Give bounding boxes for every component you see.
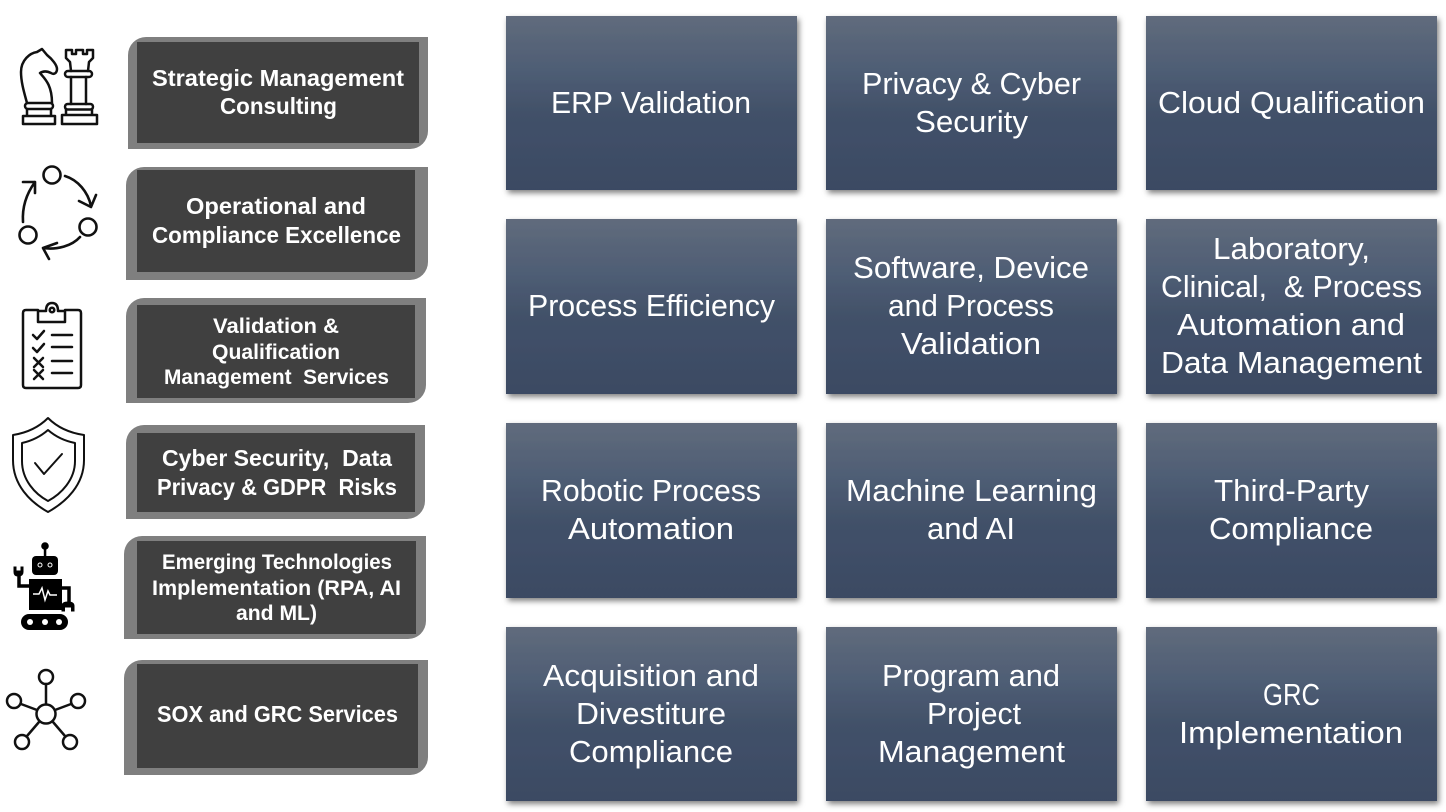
heading: Cyber Security, Data Privacy and GDPR Risks xyxy=(157,445,397,500)
tile: Laboratory, Clinical and Process Automation and Data Management xyxy=(1146,219,1437,394)
tile: Third-Party Compliance: Compliance xyxy=(1209,511,1373,546)
heading: Emerging Technologies Implementation xyxy=(152,551,401,625)
heading: Operational and Compliance Excellence: Operational and xyxy=(186,193,366,219)
tile: Software, Device and Process Validation: Validation xyxy=(901,326,1041,361)
tile: Machine Learning and AI: and AI xyxy=(927,511,1015,546)
tile: Privacy and Cyber Security: Privacy & Cyber xyxy=(862,66,1081,101)
icon: chess knight and rook xyxy=(21,49,97,124)
icon: checklist clipboard xyxy=(23,303,81,388)
heading: Validation and Qualification Management Services: Validation & xyxy=(213,315,339,338)
panel: Operational and Compliance Excellence xyxy=(126,167,428,280)
tile: Laboratory, Clinical and Process Automation and Data Management: Automation and xyxy=(1177,307,1405,342)
panel: Strategic Management Consulting xyxy=(128,37,428,149)
tile: Program and Project Management: Management xyxy=(878,734,1065,769)
heading: Strategic Management Consulting xyxy=(152,65,404,119)
heading: Emerging Technologies Implementation: Implementation (RPA, AI xyxy=(152,577,401,600)
tile: Robotic Process Automation xyxy=(506,423,797,598)
heading: Cyber Security, Data Privacy and GDPR Risks: Privacy & GDPR Risks xyxy=(157,474,397,500)
tile: Privacy and Cyber Security xyxy=(826,16,1117,190)
tile: GRC Implementation: Implementation xyxy=(1179,715,1403,750)
tile: Process Efficiency xyxy=(506,219,797,394)
heading: Emerging Technologies Implementation: Emerging Technologies xyxy=(162,551,392,574)
tile: ERP Validation xyxy=(506,16,797,190)
tile: GRC Implementation: GRC xyxy=(1263,677,1320,712)
tile: GRC Implementation xyxy=(1146,627,1437,801)
tile: Software, Device and Process Validation: and Process xyxy=(888,288,1054,323)
icon: security shield with check xyxy=(13,418,84,512)
tile: Acquisition and Divestiture Compliance: Divestiture xyxy=(576,696,726,731)
tile: Software, Device and Process Validation xyxy=(826,219,1117,394)
heading: Strategic Management Consulting: Consulting xyxy=(220,93,337,119)
tile: Robotic Process Automation: Robotic Process xyxy=(541,473,761,508)
tile: Laboratory, Clinical and Process Automation and Data Management: Laboratory, xyxy=(1213,231,1370,266)
tile: Third-Party Compliance: Third-Party xyxy=(1214,473,1369,508)
heading: Operational and Compliance Excellence: Compliance Excellence xyxy=(152,222,401,248)
panel: Emerging Technologies Implementation xyxy=(124,536,426,639)
icon: cycle of three nodes xyxy=(20,166,96,259)
icon: robot xyxy=(14,542,74,630)
heading: Cyber Security, Data Privacy and GDPR Risks: Cyber Security, Data xyxy=(162,445,392,471)
heading: Strategic Management Consulting: Strategic Management xyxy=(152,65,404,91)
tile: Software, Device and Process Validation: Software, Device xyxy=(853,250,1089,285)
tile: Laboratory, Clinical and Process Automation and Data Management: Clinical, & Process xyxy=(1161,269,1422,304)
tile: Program and Project Management xyxy=(826,627,1117,801)
tile: Program and Project Management: Project xyxy=(927,696,1021,731)
tile: Acquisition and Divestiture Compliance: Compliance xyxy=(569,734,733,769)
tile: Privacy and Cyber Security: Security xyxy=(915,104,1029,139)
tile: Machine Learning and AI xyxy=(826,423,1117,598)
tile: Robotic Process Automation: Automation xyxy=(568,511,734,546)
tile: Acquisition and Divestiture Compliance: Acquisition and xyxy=(543,658,759,693)
tile: Program and Project Management: Program and xyxy=(882,658,1060,693)
heading: Operational and Compliance Excellence xyxy=(152,193,401,248)
tile: Laboratory, Clinical and Process Automation and Data Management: Data Management xyxy=(1161,345,1422,380)
heading: Validation and Qualification Management Services xyxy=(164,315,389,389)
icon: network hub xyxy=(7,670,85,749)
panel: Cyber Security, Data Privacy and GDPR Risks xyxy=(126,425,425,519)
tile: Cloud Qualification xyxy=(1146,16,1437,190)
panel: Validation and Qualification Management Services xyxy=(126,298,426,403)
tile: Cloud Qualification: Cloud Qualification xyxy=(1158,85,1425,120)
heading: Emerging Technologies Implementation: and ML) xyxy=(236,602,317,625)
tile: Machine Learning and AI: Machine Learning xyxy=(846,473,1097,508)
tile: ERP Validation: ERP Validation xyxy=(551,85,751,120)
heading: Validation and Qualification Management Services: Qualification xyxy=(212,341,340,364)
heading: Validation and Qualification Management Services: Management Services xyxy=(164,366,389,389)
tile: Process Efficiency: Process Efficiency xyxy=(528,288,775,323)
tile: Acquisition and Divestiture Compliance xyxy=(506,627,797,801)
panel: SOX and GRC Services xyxy=(124,660,428,775)
tile: Third-Party Compliance xyxy=(1146,423,1437,598)
heading: SOX and GRC Services: SOX and GRC Services xyxy=(157,701,398,727)
